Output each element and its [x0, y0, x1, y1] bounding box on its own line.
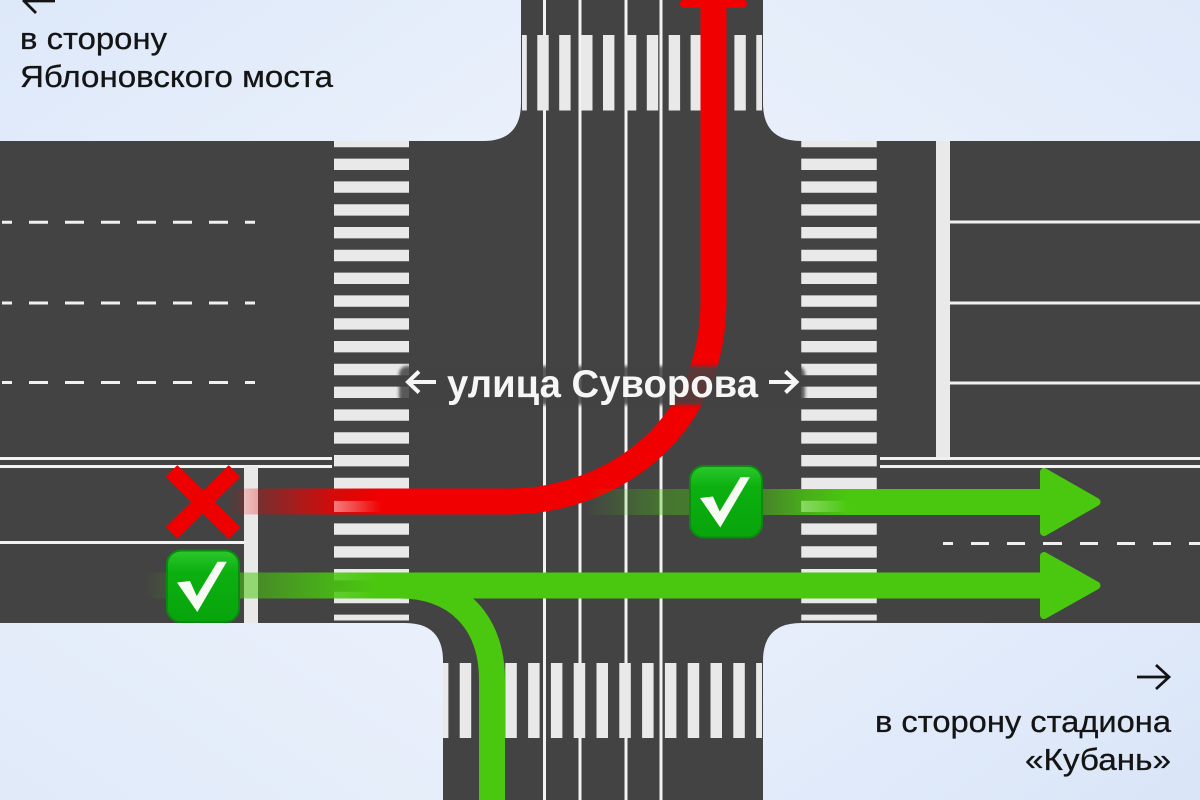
street label: улица Суворова: улица Суворова — [447, 363, 758, 406]
green turn route — [400, 586, 492, 800]
label: direction to Yablonovsky bridge: Яблоновского моста — [20, 59, 334, 94]
icon: green check upper — [690, 466, 762, 538]
label: direction to Yablonovsky bridge: в сторону — [20, 21, 168, 56]
icon: green check lower — [167, 550, 239, 622]
red forbidden route arrow — [225, 0, 743, 514]
label: direction to Kuban stadium — [875, 665, 1172, 777]
right road markings — [880, 141, 1200, 544]
label: direction to Yablonovsky bridge — [20, 0, 334, 94]
left road markings — [0, 222, 332, 623]
crosswalks — [372, 73, 839, 701]
green straight route upper arrow — [585, 472, 1096, 532]
label: direction to Kuban stadium: в сторону стадиона — [875, 704, 1172, 739]
vertical lane lines — [543, 0, 662, 800]
icon: red cross — [172, 471, 234, 533]
label: direction to Kuban stadium: «Кубань» — [1025, 742, 1171, 777]
green straight route lower arrow — [145, 556, 1096, 615]
